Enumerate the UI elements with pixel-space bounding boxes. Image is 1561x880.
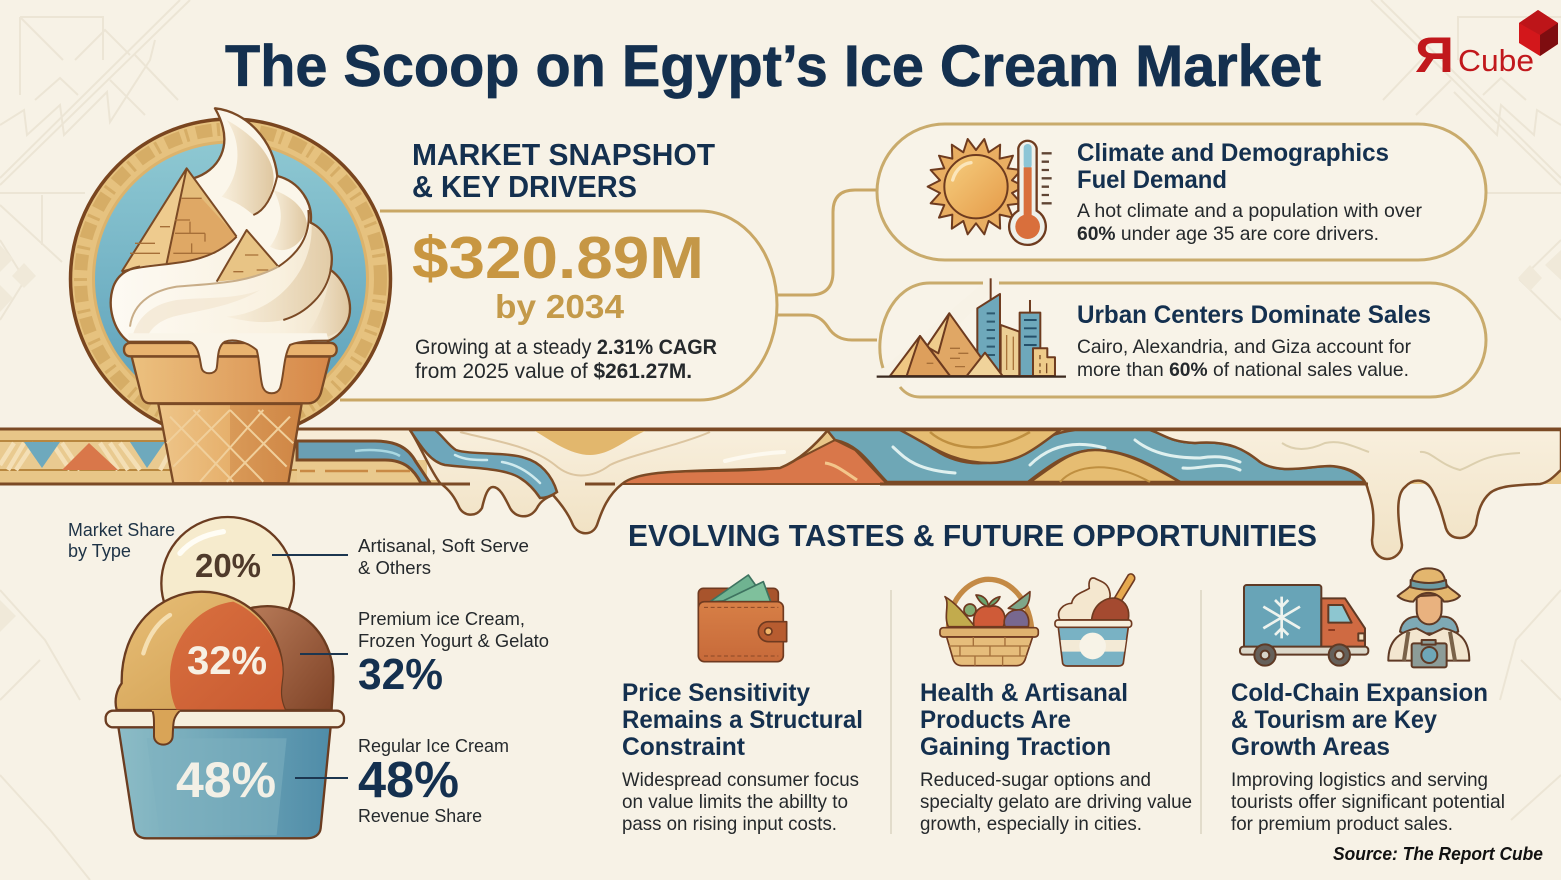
thermometer — [1009, 141, 1052, 245]
legend: artisanal: & Others — [358, 557, 431, 578]
gold wedge in melt — [535, 431, 645, 455]
legend: regular: Regular Ice Cream — [358, 735, 509, 756]
column dividers — [891, 590, 1201, 834]
heading: Gaining Traction — [920, 733, 1111, 761]
swirl shading — [222, 120, 274, 215]
heading: Products Are — [920, 706, 1071, 734]
logo cube — [1519, 10, 1558, 56]
medallion behind ice cream — [70, 119, 390, 439]
icon: wallet — [698, 575, 787, 662]
drips — [128, 333, 328, 393]
orange patch — [610, 440, 887, 484]
cone waffle — [158, 404, 302, 483]
body — [920, 769, 1192, 835]
body: specialty gelato are driving value — [920, 791, 1192, 813]
swirl outline — [111, 108, 350, 342]
heading: market snapshot: MARKET SNAPSHOT — [412, 137, 715, 172]
body: for premium product sales. — [1231, 813, 1453, 835]
left patterned strip — [0, 440, 300, 470]
legend: premium: Premium ice Cream, — [358, 608, 525, 629]
ribbon borders — [0, 428, 1561, 430]
melting cream right — [1150, 430, 1561, 559]
heading: Price Sensitivity — [622, 679, 810, 707]
text: urban block — [1077, 301, 1431, 381]
body: Widespread consumer focus — [622, 769, 859, 791]
heading: market snapshot: & KEY DRIVERS — [412, 169, 637, 204]
text: growth description: Growing at a steady 2.31% CAGR — [415, 336, 717, 359]
label: market share by type: Market Share — [68, 520, 175, 540]
legend: premium: Frozen Yogurt & Gelato — [358, 630, 549, 651]
label 48%: 48% — [176, 752, 276, 808]
cup rim — [106, 711, 344, 727]
caramel drip — [152, 710, 180, 745]
lower swirl band — [111, 223, 350, 342]
chart: market share ice cream cup — [106, 517, 344, 838]
heading — [1077, 139, 1389, 194]
blue river left — [297, 441, 430, 483]
stat labels inside cup — [176, 547, 276, 808]
logo: RCube: Cube — [1458, 43, 1534, 78]
blue river right — [827, 430, 1366, 482]
panel: market snapshot capsule — [340, 211, 777, 400]
heading: Growth Areas — [1231, 733, 1390, 761]
logo wordmark: Я — [1415, 27, 1454, 83]
icon: tourist with camera — [1388, 568, 1469, 667]
ribbon base — [0, 429, 1561, 484]
legend: regular: 48% — [358, 751, 459, 808]
label: market share by type: by Type — [68, 541, 131, 561]
text: cold chain column — [1231, 679, 1505, 835]
label: market share by type — [68, 520, 175, 561]
body: Cairo, Alexandria, and Giza account for — [1077, 336, 1411, 358]
text: growth description: from 2025 value of $261.27M. — [415, 360, 692, 383]
heading: evolving tastes: EVOLVING TASTES & FUTURE OPPORTUNITIES — [628, 518, 1317, 553]
title: The Scoop on Egypt’s Ice Cream Market — [225, 34, 1321, 99]
gold arch patches — [900, 430, 1060, 463]
legend: regular — [358, 735, 509, 826]
middle cream strip — [297, 430, 470, 480]
swirl lines — [122, 176, 331, 320]
body — [1231, 769, 1505, 835]
label 20%: 20% — [195, 547, 261, 584]
small pyramid — [217, 230, 278, 282]
cone cup — [132, 357, 330, 403]
leader lines — [272, 555, 348, 778]
icon: sun and thermometer — [928, 139, 1052, 245]
text: price sensitivity column — [622, 679, 863, 835]
text: climate block — [1077, 139, 1423, 245]
label 32%: 32% — [187, 639, 267, 683]
body — [622, 769, 859, 835]
sun — [928, 139, 1024, 234]
icon: fruit basket — [940, 579, 1038, 666]
scoop: 32% gold and orange — [116, 592, 285, 710]
heading: Fuel Demand — [1077, 166, 1227, 194]
zigzag ring pattern — [80, 129, 380, 429]
scoop: 20% artisanal — [161, 517, 294, 650]
panel: urban capsule — [880, 283, 1486, 397]
background diamonds — [0, 245, 1561, 632]
heading: Climate and Demographics — [1077, 139, 1389, 167]
large pyramid — [122, 168, 237, 270]
illustration: soft serve cone with pyramids — [111, 108, 350, 483]
body: 60% under age 35 are core drivers. — [1077, 223, 1379, 245]
body: on value limits the abillty to — [622, 791, 848, 813]
heading: Urban Centers Dominate Sales — [1077, 301, 1431, 329]
panel: climate capsule — [877, 124, 1486, 260]
cone rim — [124, 343, 337, 356]
logo: RCube — [1415, 10, 1558, 83]
body: pass on rising input costs. — [622, 813, 837, 835]
icon: gelato cup — [1055, 574, 1135, 666]
heading: & Tourism are Key — [1231, 706, 1437, 734]
heading: Remains a Structural — [622, 706, 863, 734]
scoop: 32% brown — [250, 606, 333, 710]
melting cream centre — [410, 430, 828, 533]
text: growth description — [415, 336, 717, 383]
legend: premium — [358, 608, 549, 699]
icon: refrigerated truck — [1240, 585, 1368, 666]
body: more than 60% of national sales value. — [1077, 359, 1409, 381]
heading — [622, 679, 863, 761]
body: Reduced-sugar options and — [920, 769, 1151, 791]
heading: Health & Artisanal — [920, 679, 1128, 707]
body: tourists offer significant potential — [1231, 791, 1505, 813]
connector lines — [777, 190, 877, 340]
lower swirl shading — [227, 225, 331, 322]
body — [1077, 200, 1423, 245]
river highlights — [893, 440, 1240, 473]
ribbon band — [0, 429, 1561, 559]
body: A hot climate and a population with over — [1077, 200, 1423, 222]
heading: Cold-Chain Expansion — [1231, 679, 1488, 707]
cup body — [118, 727, 331, 838]
text: health column — [920, 679, 1192, 835]
source credit: Source: The Report Cube — [1333, 844, 1543, 864]
heading — [920, 679, 1128, 761]
body: growth, especially in cities. — [920, 813, 1142, 835]
body: Improving logistics and serving — [1231, 769, 1488, 791]
legend: artisanal — [358, 535, 529, 578]
legend: premium: 32% — [358, 650, 443, 699]
blue stream through the cream — [410, 430, 557, 498]
stat: by 2034: by 2034 — [495, 288, 625, 325]
body — [1077, 336, 1411, 381]
legend: artisanal: Artisanal, Soft Serve — [358, 535, 529, 556]
soft serve base — [111, 108, 350, 342]
stat: market value: $320.89M — [412, 225, 704, 291]
heading: market snapshot — [412, 137, 715, 204]
heading: Constraint — [622, 733, 746, 761]
legend: regular: Revenue Share — [358, 805, 482, 826]
icon: pyramids and city skyline — [877, 278, 1066, 377]
heading — [1231, 679, 1488, 761]
